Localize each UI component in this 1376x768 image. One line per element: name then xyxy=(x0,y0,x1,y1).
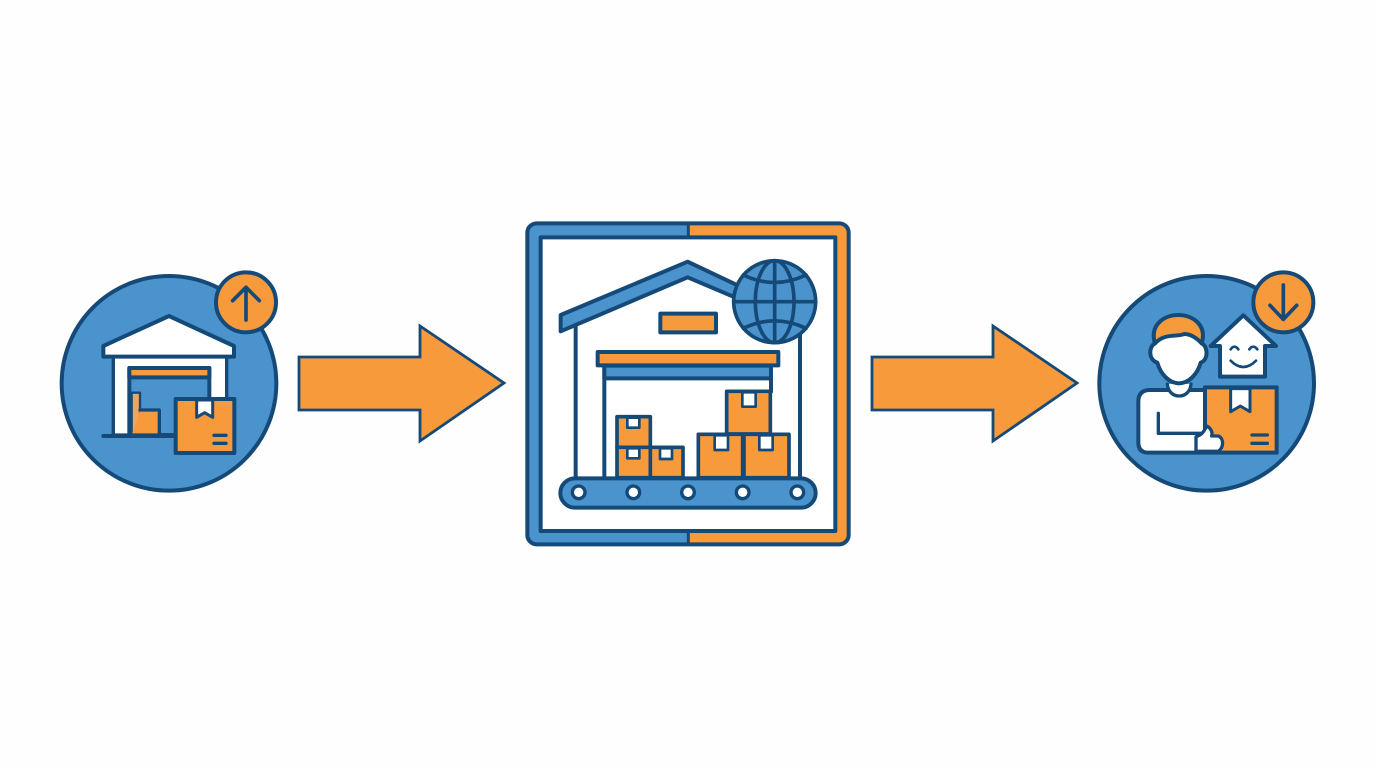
icon: origin warehouse in blue circle xyxy=(62,272,276,491)
door frame xyxy=(598,352,778,478)
arrow: hub to customer xyxy=(872,326,1077,441)
smiling house xyxy=(1211,315,1276,377)
person xyxy=(1138,315,1207,453)
warehouse walls xyxy=(576,327,800,478)
stacked boxes xyxy=(617,391,789,478)
badge: down arrow xyxy=(1253,272,1313,332)
split frame xyxy=(527,223,849,544)
parcel xyxy=(1196,387,1277,453)
warehouse building xyxy=(103,316,234,436)
roof xyxy=(561,262,738,331)
arrow: origin to hub xyxy=(299,326,504,441)
badge: up arrow xyxy=(216,272,276,332)
icon: fulfilment warehouse in square frame xyxy=(527,223,849,544)
sign xyxy=(660,314,716,332)
conveyor belt xyxy=(560,478,816,508)
shipping box xyxy=(176,399,234,453)
globe xyxy=(734,261,816,343)
icon: customer receiving parcel in blue circle xyxy=(1099,272,1314,491)
